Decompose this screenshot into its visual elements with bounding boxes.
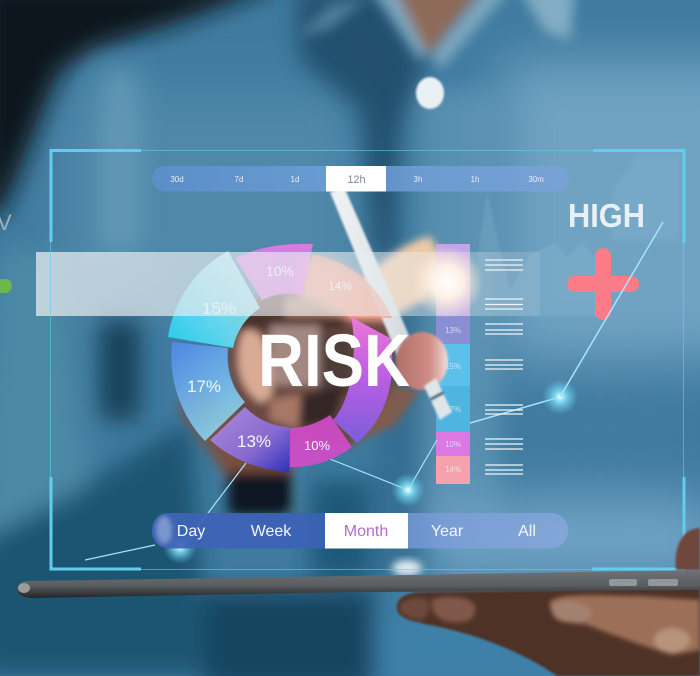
stacked percent bar: 10% xyxy=(445,440,461,449)
segment 14% xyxy=(305,254,392,318)
period pill: day to all: Month xyxy=(344,523,388,540)
donut labels: 13% xyxy=(237,432,271,451)
lens flare at fingertip xyxy=(411,246,483,318)
segment 10% top xyxy=(235,244,313,300)
segment 13% xyxy=(210,407,290,472)
hand holding the pen xyxy=(225,236,445,448)
hand under tablet xyxy=(397,528,700,676)
timeframe pill: hours and days: 1h xyxy=(471,175,479,184)
timeframe pill: hours and days: 3h xyxy=(414,175,422,184)
stacked percent bar: 14% xyxy=(445,465,461,474)
pen tip xyxy=(424,378,452,420)
timeframe pill: hours and days xyxy=(152,166,569,192)
translucent chart silhouette xyxy=(470,153,680,316)
icon: plus sign xyxy=(575,256,631,312)
heading: HIGH: HIGH xyxy=(568,197,645,234)
segment 17% xyxy=(171,342,245,441)
pen upper barrel xyxy=(330,189,425,382)
donut labels xyxy=(187,263,352,453)
segment 15% xyxy=(168,251,260,348)
donut labels: 10% xyxy=(304,438,330,453)
legend line groups xyxy=(485,260,523,474)
donut labels: 17% xyxy=(187,377,221,396)
segment 10% bottom xyxy=(290,415,352,467)
heading: RISK: RISK xyxy=(258,319,410,402)
donut labels: 10% xyxy=(266,263,294,279)
donut chart xyxy=(168,244,392,472)
timeframe pill: hours and days: 1d xyxy=(291,175,299,184)
period pill: day to all xyxy=(152,513,568,548)
donut labels: 14% xyxy=(328,279,352,293)
period pill: day to all: Day xyxy=(177,523,205,540)
shirt button xyxy=(416,77,444,109)
tablet xyxy=(17,570,700,598)
segment right xyxy=(333,317,392,443)
left edge remnant: chart label and marker xyxy=(0,210,12,293)
donut labels: 15% xyxy=(202,299,236,318)
translucent white band xyxy=(36,252,540,316)
rising trend line xyxy=(560,222,663,397)
period pill: day to all: All xyxy=(518,523,536,540)
stacked percent bar: 17% xyxy=(445,405,461,414)
period pill: day to all: Week xyxy=(251,523,292,540)
timeframe pill: hours and days: 12h xyxy=(347,174,366,186)
timeframe pill: hours and days: 7d xyxy=(235,175,243,184)
stacked percent bar: 13% xyxy=(445,326,461,335)
timeframe pill: hours and days: 30d xyxy=(170,175,184,184)
period pill: day to all: Year xyxy=(431,523,464,540)
fingertip over bar xyxy=(396,332,448,390)
timeframe pill: hours and days: 30m xyxy=(528,175,544,184)
connector lines with glowing nodes xyxy=(85,379,578,564)
hud frame xyxy=(50,150,684,570)
stacked percent bar: 15% xyxy=(445,362,461,371)
stacked percent bar xyxy=(436,244,470,484)
